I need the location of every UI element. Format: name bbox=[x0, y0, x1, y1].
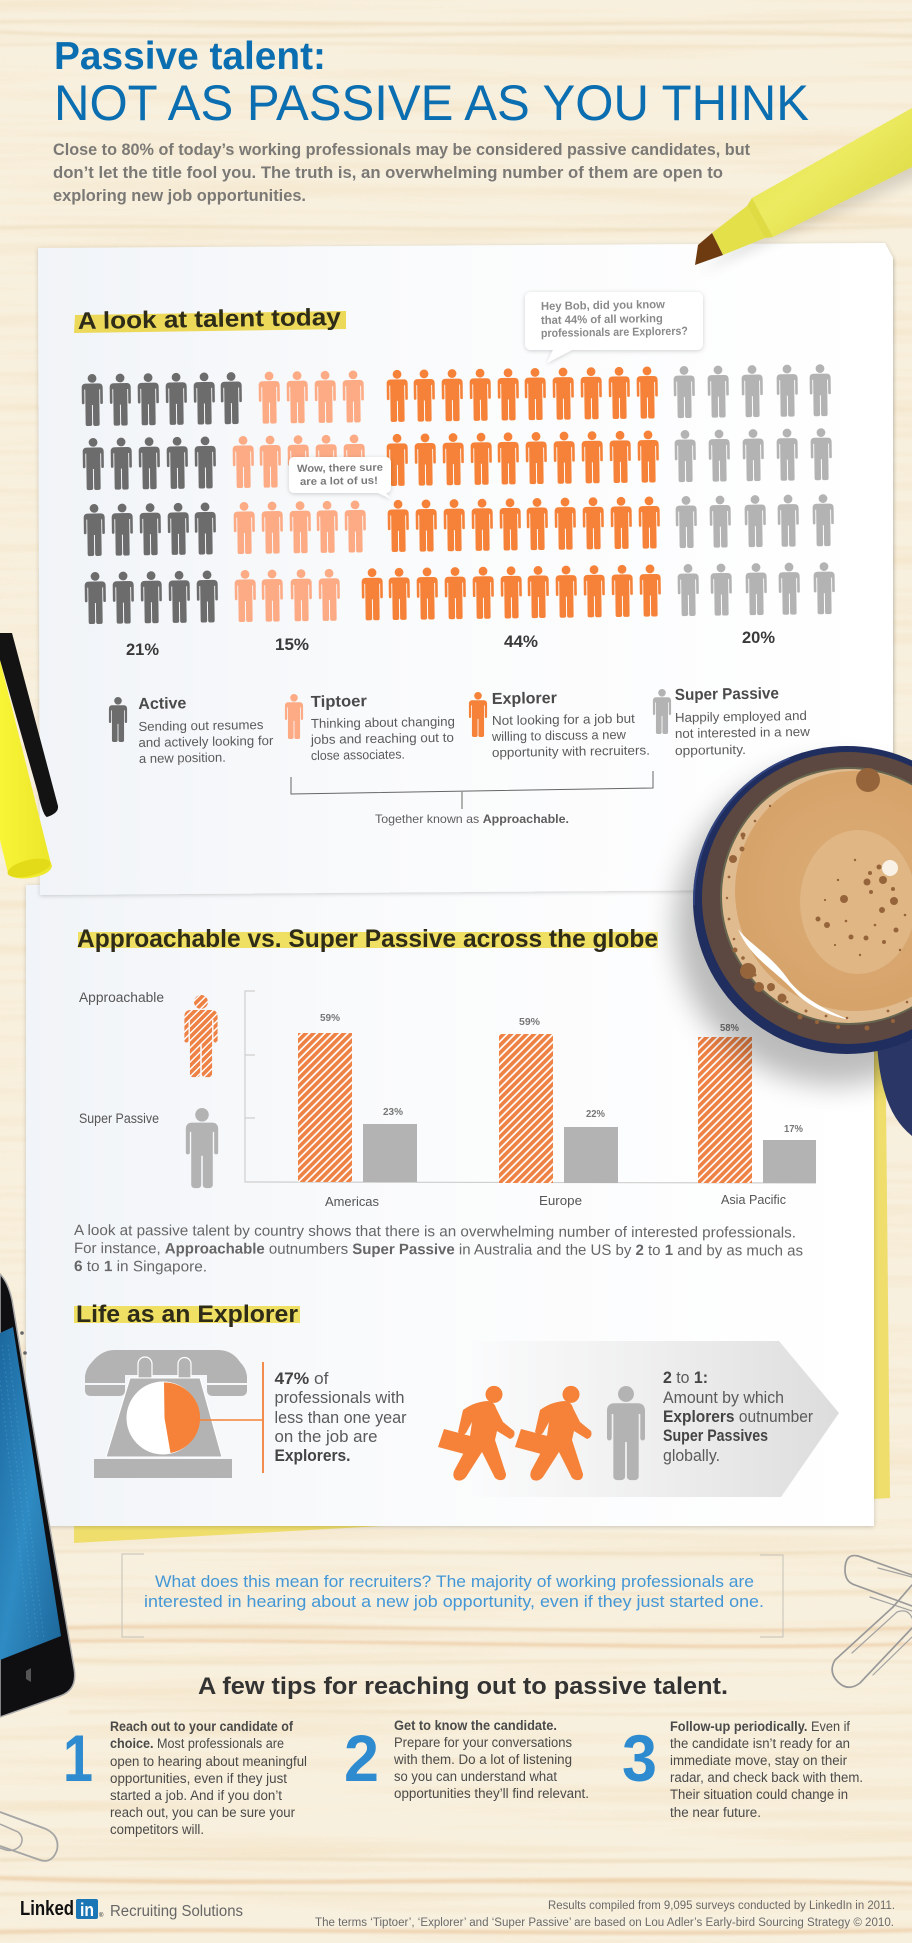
pictogram row 4 bbox=[85, 562, 835, 624]
arrow: grey background chevron bbox=[470, 1341, 839, 1497]
logo: LinkedIn Recruiting Solutions: in bbox=[80, 1900, 94, 1920]
speech bubble: Wow bbox=[289, 457, 391, 499]
back sheet edge bbox=[60, 257, 893, 1050]
bar chart: Approachable vs Super Passive by region bbox=[245, 991, 816, 1209]
logo: LinkedIn Recruiting Solutions bbox=[20, 1898, 243, 1920]
text: 2 to 1 stat: 2 to 1: bbox=[663, 1368, 708, 1387]
title bbox=[54, 35, 809, 131]
legend: Active bbox=[109, 695, 274, 766]
title: Passive talent: bbox=[54, 35, 326, 78]
tip 2: 2 bbox=[344, 1721, 379, 1795]
bracket: together known as Approachable bbox=[291, 771, 653, 826]
chart legend: Approachable: Approachable bbox=[79, 990, 164, 1005]
footer source notes: Results compiled from 9,095 surveys conducted by LinkedIn in 2011. bbox=[548, 1900, 895, 1912]
tip 3: immediate move, stay on their bbox=[670, 1753, 847, 1768]
chart legend: Approachable bbox=[79, 990, 218, 1077]
speech bubble: Wow: Wow, there sure bbox=[297, 462, 383, 475]
legend: Tiptoer: Thinking about changing bbox=[311, 714, 455, 731]
chart legend: Super Passive: Super Passive bbox=[79, 1111, 159, 1126]
bars: Europe: 59% bbox=[519, 1016, 541, 1028]
tip 2: so you can understand what bbox=[394, 1769, 557, 1784]
legend: Tiptoer: close associates. bbox=[311, 747, 405, 763]
tip 1: choice. Most professionals are bbox=[110, 1736, 284, 1751]
legend: Super Passive: Super Passive bbox=[675, 685, 779, 704]
legend: Active: and actively looking for bbox=[138, 733, 274, 750]
tip 2: Get to know the candidate. bbox=[394, 1718, 557, 1733]
text: 47% stat: professionals with bbox=[274, 1388, 404, 1407]
speech bubble: Wow: are a lot of us! bbox=[300, 475, 378, 488]
lower paper sheet bbox=[26, 885, 874, 1526]
pictogram row 2 bbox=[83, 428, 832, 490]
icon: telephone with 47% pie bbox=[85, 1350, 263, 1478]
text: 2 to 1 stat bbox=[663, 1368, 813, 1465]
icon: yellow marker with black clip bbox=[0, 633, 58, 881]
speech bubble: Hey Bob: professionals are Explorers? bbox=[541, 326, 688, 340]
tip 1: started a job. And if you don’t bbox=[110, 1788, 282, 1803]
bars: Americas: Americas bbox=[325, 1194, 379, 1209]
text: 47% stat: less than one year bbox=[274, 1408, 407, 1427]
tip 1: reach out, you can be sure your bbox=[110, 1805, 295, 1820]
tip 2: Prepare for your conversations bbox=[394, 1735, 572, 1750]
bracket: together known as Approachable: Together known as Approachable. bbox=[375, 812, 569, 826]
bars: Americas bbox=[298, 1012, 417, 1209]
intro text: Close to 80% of today’s working professionals may be considered passive candidates, but bbox=[53, 141, 750, 159]
intro text: exploring new job opportunities. bbox=[53, 187, 306, 205]
upper paper sheet bbox=[38, 243, 893, 895]
tip 3: 3 bbox=[622, 1721, 657, 1795]
heading: Approachable vs. Super Passive: Approachable vs. Super Passive across the globe bbox=[77, 925, 658, 953]
icon: smartphone bbox=[0, 1274, 75, 1717]
footer source notes: The terms ‘Tiptoer’, ‘Explorer’ and ‘Super Passive’ are based on Lou Adler’s Early-bird Sourcing Strategy © 2010. bbox=[315, 1917, 894, 1929]
legend: Tiptoer bbox=[285, 693, 455, 763]
footer source notes bbox=[315, 1900, 895, 1929]
pictogram row 3 bbox=[84, 494, 834, 556]
logo: LinkedIn Recruiting Solutions: ® bbox=[99, 1912, 104, 1919]
callout frame and text: What does this mean for recruiters? The majority of working professionals are bbox=[155, 1573, 754, 1591]
text: 47% stat: 47% of bbox=[274, 1369, 329, 1388]
legend: Super Passive: Happily employed and bbox=[675, 708, 807, 725]
bars: Asia Pacific: Asia Pacific bbox=[721, 1192, 786, 1207]
intro text bbox=[53, 141, 750, 205]
text: 2 to 1 stat: Explorers outnumber bbox=[663, 1407, 813, 1426]
legend: Explorer: opportunity with recruiters. bbox=[492, 743, 650, 760]
tip 2: opportunities they’ll find relevant. bbox=[394, 1786, 589, 1801]
speech bubble: Hey Bob: that 44% of all working bbox=[541, 313, 663, 327]
callout frame and text bbox=[122, 1554, 783, 1637]
chart legend: Super Passive bbox=[79, 1108, 218, 1188]
legend: Explorer: willing to discuss a new bbox=[491, 727, 627, 744]
legend: Explorer bbox=[469, 690, 650, 760]
legend: Active: Active bbox=[138, 695, 187, 713]
icon: paper clips right bbox=[832, 1556, 912, 1687]
percent labels: 21% bbox=[126, 640, 159, 659]
logo: LinkedIn Recruiting Solutions: Linked bbox=[20, 1898, 74, 1920]
bars: Americas: 59% bbox=[320, 1012, 341, 1024]
tip 2: with them. Do a lot of listening bbox=[393, 1752, 572, 1767]
text: 2 to 1 stat: Amount by which bbox=[663, 1388, 784, 1407]
bars: Europe bbox=[499, 1016, 618, 1208]
percent labels: 15% bbox=[275, 635, 309, 654]
legend: Explorer: Explorer bbox=[492, 690, 557, 708]
icon: coffee mug bbox=[675, 746, 912, 1136]
legend: Super Passive: opportunity. bbox=[675, 742, 746, 758]
tip 1: Reach out to your candidate of bbox=[110, 1719, 293, 1734]
tip 3: the candidate isn’t ready for an bbox=[670, 1736, 850, 1751]
callout frame and text: interested in hearing about a new job opportunity, even if they just started one. bbox=[144, 1593, 764, 1611]
legend: Active: Sending out resumes bbox=[138, 717, 264, 734]
legend: Explorer: Not looking for a job but bbox=[492, 711, 635, 728]
percent labels: 44% bbox=[504, 632, 538, 651]
tip 1: competitors will. bbox=[110, 1822, 204, 1837]
icon: two walking explorers and one super passive bbox=[438, 1386, 645, 1481]
legend: Tiptoer: jobs and reaching out to bbox=[310, 730, 454, 747]
text: 2 to 1 stat: globally. bbox=[663, 1446, 720, 1465]
paragraph: passive talent by country bbox=[74, 1222, 803, 1275]
tip 1 bbox=[63, 1719, 307, 1837]
paragraph: passive talent by country: A look at passive talent by country shows that there is an overwhelming number of interested professionals. bbox=[74, 1222, 796, 1242]
text: 47% stat: on the job are bbox=[274, 1427, 378, 1446]
tip 3: radar, and check back with them. bbox=[670, 1770, 863, 1785]
tip 3: the near future. bbox=[670, 1805, 761, 1820]
heading: A look at talent today: A look at talent today bbox=[78, 304, 342, 335]
text: 47% stat: Explorers. bbox=[274, 1446, 350, 1465]
paragraph: passive talent by country: 6 to 1 in Singapore. bbox=[74, 1258, 207, 1275]
tip 1: 1 bbox=[63, 1721, 93, 1795]
legend: Super Passive: not interested in a new bbox=[675, 724, 811, 741]
legend: Active: a new position. bbox=[139, 750, 226, 766]
heading: Life as an Explorer: Life as an Explorer bbox=[76, 1301, 298, 1328]
speech bubble: Hey Bob bbox=[525, 292, 703, 363]
bars: Europe: 22% bbox=[586, 1108, 606, 1120]
text: 2 to 1 stat: Super Passives bbox=[663, 1426, 768, 1445]
pictogram row 1 bbox=[82, 364, 831, 426]
text: 47% stat bbox=[274, 1369, 407, 1465]
intro text: don’t let the title fool you. The truth is, an overwhelming number of them are open to bbox=[53, 164, 723, 182]
percent labels: 20% bbox=[742, 628, 775, 647]
tip 2 bbox=[344, 1718, 589, 1801]
logo: LinkedIn Recruiting Solutions: Recruiting Solutions bbox=[110, 1903, 243, 1920]
title: NOT AS PASSIVE AS YOU THINK bbox=[54, 75, 809, 131]
speech bubble: Hey Bob: Hey Bob, did you know bbox=[541, 299, 665, 313]
bars: Asia Pacific: 17% bbox=[784, 1123, 804, 1135]
tip 1: open to hearing about meaningful bbox=[110, 1754, 307, 1769]
tip 3: Follow-up periodically. Even if bbox=[670, 1719, 850, 1734]
yellow sticky note behind the paper bbox=[74, 1000, 890, 1543]
percent labels bbox=[126, 628, 775, 659]
tip 1: opportunities, even if they just bbox=[110, 1771, 287, 1786]
heading: tips: A few tips for reaching out to passive talent. bbox=[198, 1673, 728, 1700]
pictogram grid: talent mix bbox=[82, 364, 835, 624]
icon: yellow highlighter top right bbox=[695, 108, 912, 272]
icon: paper clip left bbox=[0, 1812, 58, 1861]
bars: Europe: Europe bbox=[539, 1193, 582, 1208]
paragraph: passive talent by country: For instance, Approachable outnumbers Super Passive in Australia and the US by 2 to 1 and by as much as bbox=[74, 1240, 803, 1260]
bars: Asia Pacific bbox=[698, 1022, 816, 1207]
bars: Americas: 23% bbox=[383, 1106, 404, 1118]
bars: Asia Pacific: 58% bbox=[720, 1022, 740, 1034]
legend: Tiptoer: Tiptoer bbox=[311, 693, 367, 711]
tip 3: Their situation could change in bbox=[670, 1787, 848, 1802]
legend: Super Passive bbox=[653, 685, 811, 758]
tip 3 bbox=[622, 1719, 863, 1820]
